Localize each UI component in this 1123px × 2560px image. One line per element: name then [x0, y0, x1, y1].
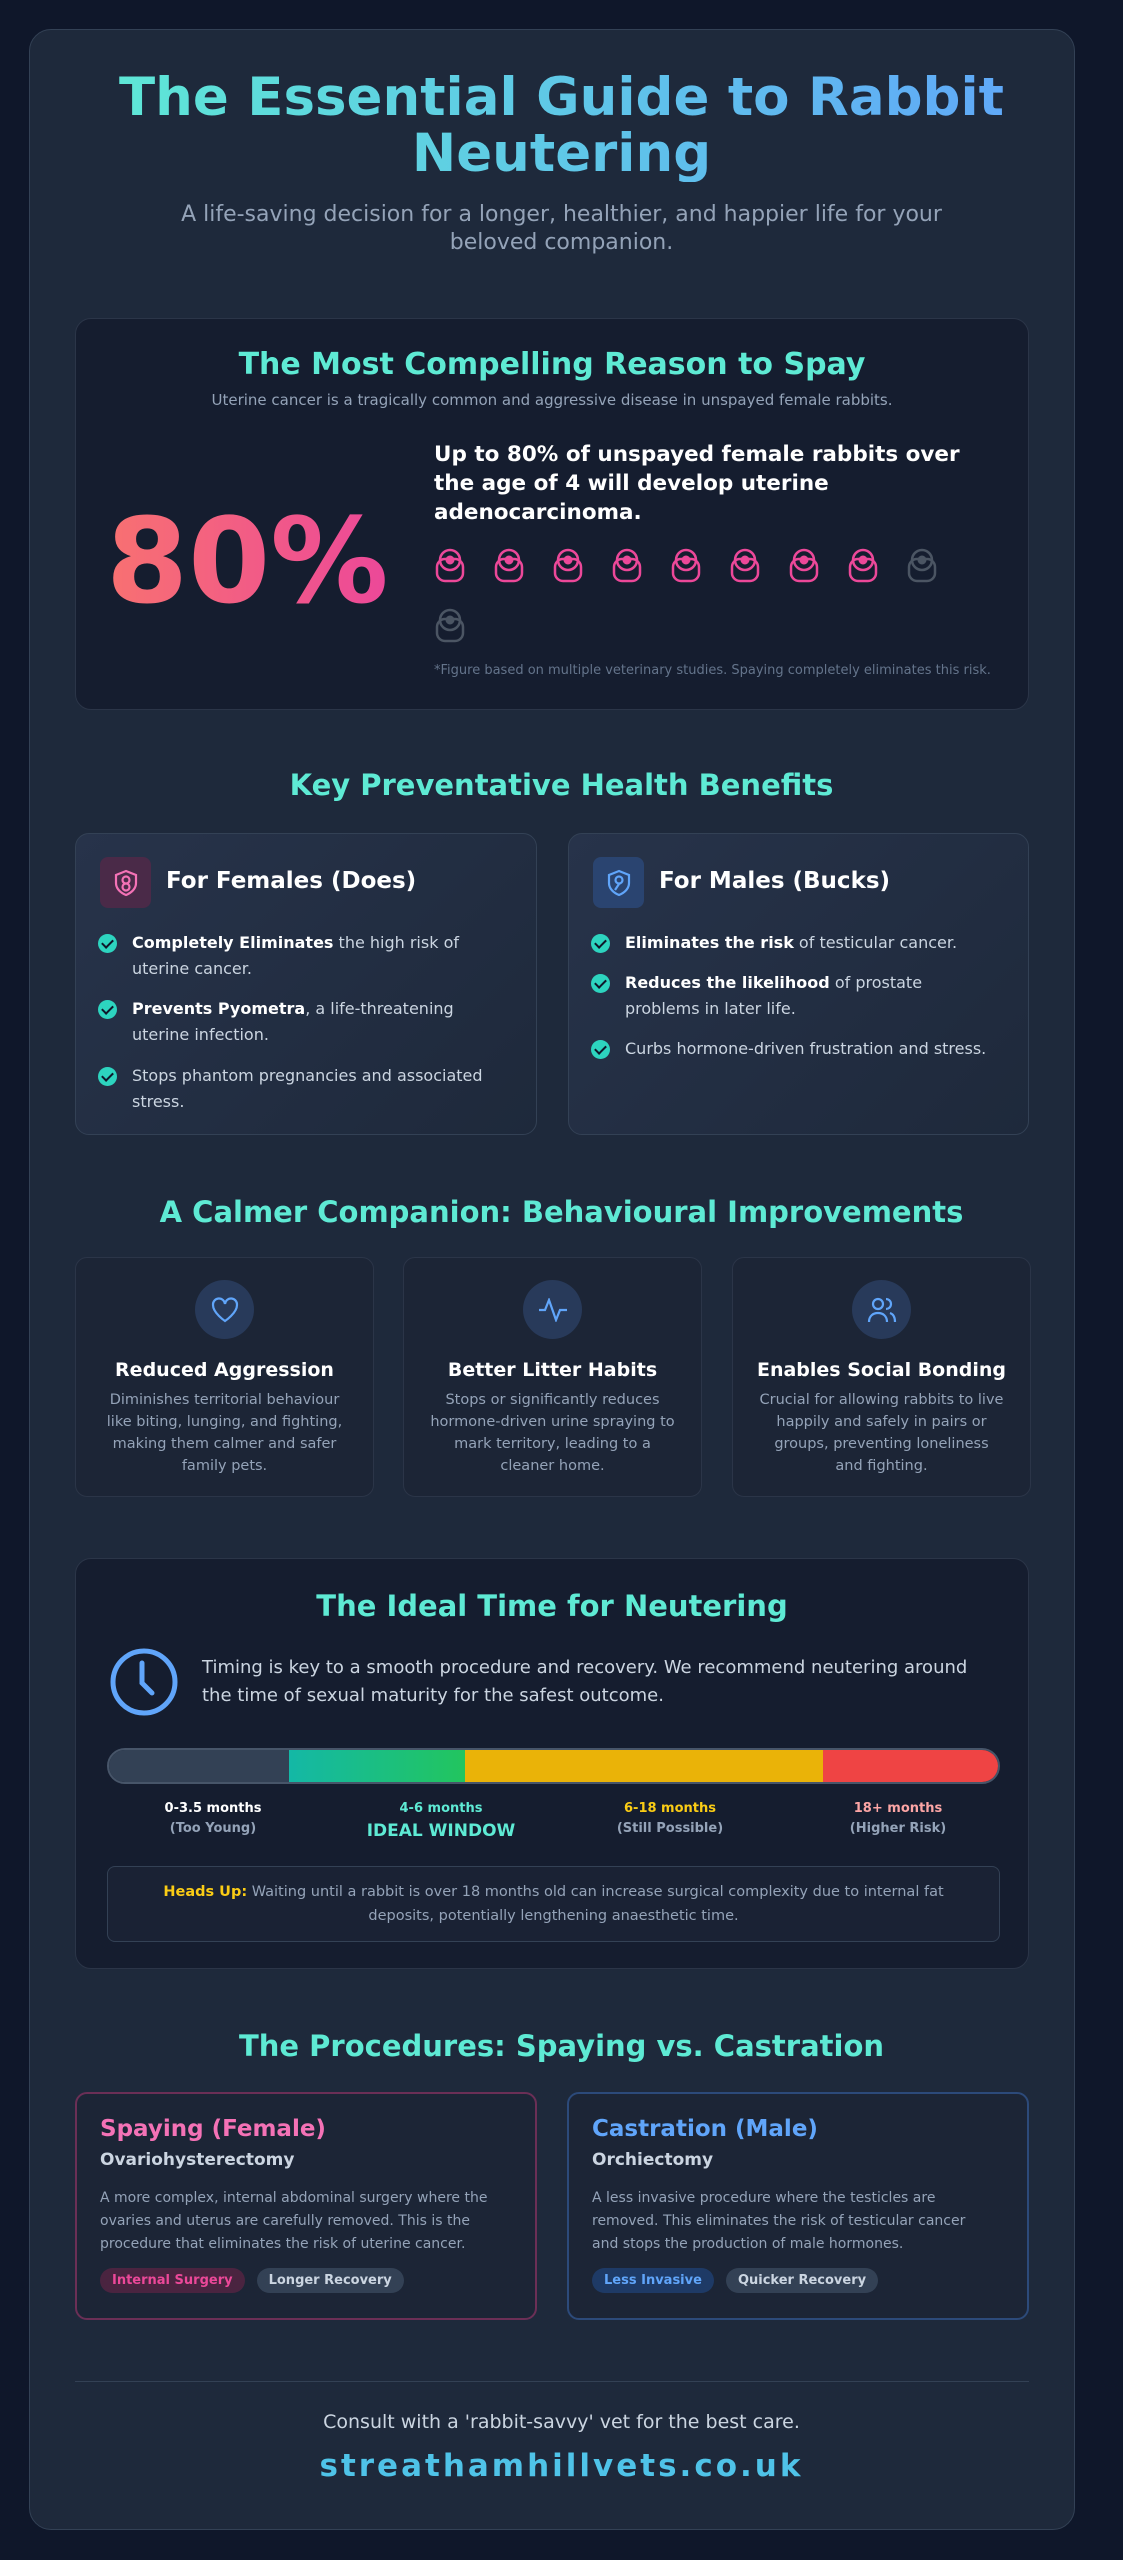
timeline labels: 6-18 months — [624, 1801, 716, 1816]
card: spaying — [75, 2092, 537, 2320]
heads up callout: Heads Up: Waiting until a rabbit is over 18 months old can increase surgical complexity due to internal fat deposits, potentially lengthening anaesthetic time. — [163, 1884, 944, 1924]
timeline labels: (Still Possible) — [617, 1821, 723, 1836]
heading: procedures: The Procedures: Spaying vs. Castration — [239, 2029, 884, 2063]
bullets: Eliminates the risk of testicular cancer. — [625, 933, 957, 952]
panel: females — [75, 833, 537, 1135]
card: bonding — [732, 1257, 1031, 1497]
panel: males: Reduces the likelihood of prostate problems in later life. — [625, 973, 922, 1018]
heading: benefits: Key Preventative Health Benefits — [290, 768, 833, 802]
timeline labels: IDEAL WINDOW — [367, 1821, 515, 1841]
heading: behaviour: A Calmer Companion: Behavioural Improvements — [160, 1195, 963, 1229]
subtitle: A life-saving decision for a longer, healthier, and happier life for your beloved companion. — [181, 202, 942, 255]
heads up callout — [107, 1866, 1000, 1942]
panel: ideal time — [75, 1558, 1029, 1969]
heading: The Most Compelling Reason to Spay — [239, 347, 865, 382]
card: castration: Castration (Male) — [592, 2116, 818, 2142]
intro text: Timing is key to a smooth procedure and recovery. We recommend neutering around the time of sexual maturity for the safest outcome. — [202, 1657, 967, 1706]
card: spaying: A more complex, internal abdominal surgery where the ovaries and uterus are carefully removed. This is the procedure that eliminates the risk of uterine cancer. — [100, 2190, 487, 2252]
card: litter — [403, 1257, 702, 1497]
card: aggression: Reduced Aggression — [115, 1359, 334, 1381]
card: castration: Quicker Recovery — [738, 2273, 866, 2288]
stat text: Up to 80% of unspayed female rabbits over the age of 4 will develop uterine adenocarcinoma. — [434, 442, 960, 525]
icon: heart — [195, 1280, 254, 1339]
panel: males: Curbs hormone-driven frustration and stress. — [625, 1039, 986, 1058]
footnote: *Figure based on multiple veterinary studies. Spaying completely eliminates this risk. — [434, 663, 991, 678]
card: bonding: Enables Social Bonding — [757, 1359, 1006, 1381]
card title: For Females (Does) — [166, 868, 416, 894]
icon: female shield — [100, 857, 151, 908]
icon: pulse — [523, 1280, 582, 1339]
card: castration: Orchiectomy — [592, 2150, 713, 2170]
card: bonding: Crucial for allowing rabbits to live happily and safely in pairs or groups, preventing loneliness and fighting. — [760, 1392, 1003, 1474]
timeline labels: (Too Young) — [170, 1821, 256, 1836]
panel: females: Prevents Pyometra, a life-threatening uterine infection. — [132, 999, 454, 1044]
subheading: Uterine cancer is a tragically common and aggressive disease in unspayed female rabbits. — [211, 391, 893, 409]
card: litter: Better Litter Habits — [448, 1359, 657, 1381]
card: castration: Less Invasive — [604, 2273, 702, 2288]
card: aggression — [75, 1257, 374, 1497]
panel: males — [568, 833, 1029, 1135]
card: spaying: Spaying (Female) — [100, 2116, 326, 2142]
bullets: Completely Eliminates the high risk of uterine cancer. — [132, 933, 459, 978]
card: litter: Stops or significantly reduces hormone-driven urine spraying to mark territory, leading to a cleaner home. — [430, 1392, 675, 1474]
panel: compelling reason — [75, 318, 1029, 710]
timeline labels: (Higher Risk) — [850, 1821, 946, 1836]
card: castration: A less invasive procedure where the testicles are removed. This eliminates the risk of testicular cancer and stops the production of male hormones. — [592, 2190, 965, 2252]
timeline bar — [107, 1748, 1000, 1784]
card: spaying: Internal Surgery — [112, 2273, 233, 2288]
timeline labels: 0-3.5 months — [165, 1801, 261, 1816]
card title: For Males (Bucks) — [659, 868, 890, 894]
timeline labels: 4-6 months — [400, 1801, 482, 1816]
card: spaying: Longer Recovery — [269, 2273, 392, 2288]
card: castration — [567, 2092, 1029, 2320]
footer url: streathamhillvets.co.uk — [320, 2448, 803, 2484]
card: aggression: Diminishes territorial behaviour like biting, lunging, and fighting, making them calmer and safer family pets. — [107, 1392, 342, 1474]
heading: The Ideal Time for Neutering — [316, 1589, 788, 1623]
title: The Essential Guide to Rabbit Neutering — [119, 67, 1004, 184]
icon: clock — [110, 1648, 178, 1716]
card: spaying: Ovariohysterectomy — [100, 2150, 294, 2170]
footer text: Consult with a 'rabbit-savvy' vet for the best care. — [323, 2411, 800, 2433]
panel: females: Stops phantom pregnancies and associated stress. — [132, 1066, 483, 1111]
icon: users — [852, 1280, 911, 1339]
timeline labels — [165, 1801, 946, 1841]
big stat: 80% — [106, 492, 388, 630]
icon grid — [436, 548, 936, 642]
icon: male shield — [593, 857, 644, 908]
timeline labels: 18+ months — [854, 1801, 942, 1816]
